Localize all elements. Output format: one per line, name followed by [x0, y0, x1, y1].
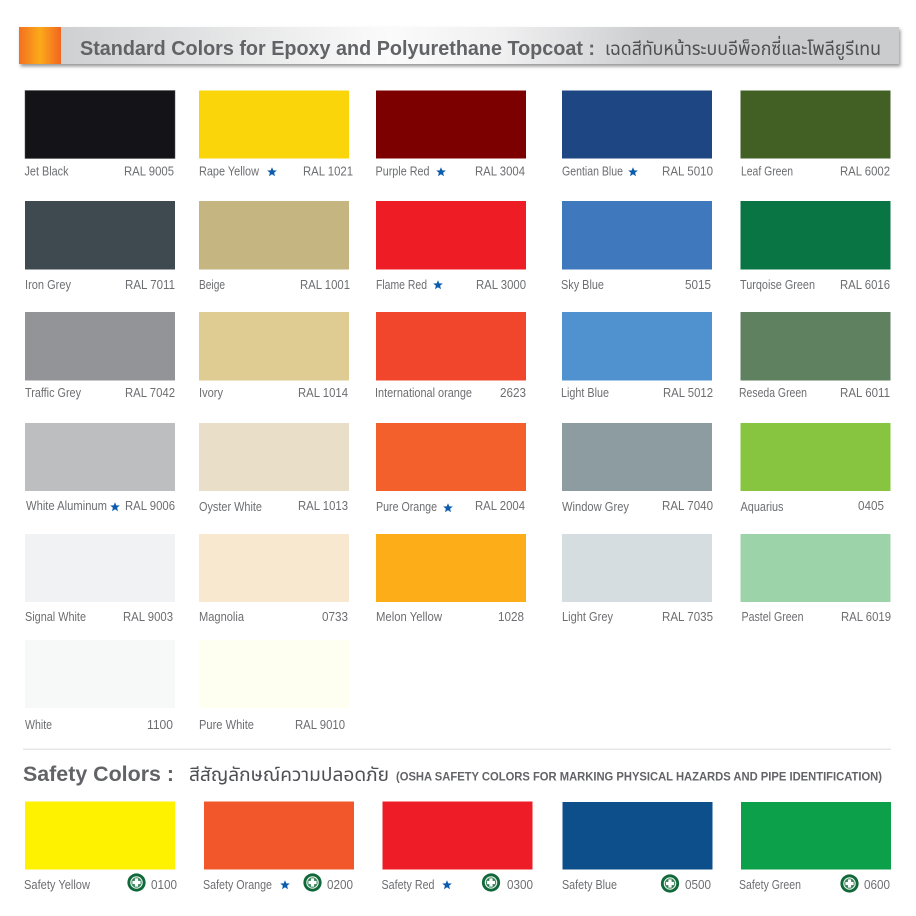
swatch: Sky Blue: [561, 201, 712, 292]
swatch: International orange: International orange: [375, 385, 472, 400]
swatch: Turqoise Green: Turqoise Green: [740, 277, 815, 292]
swatch: Turqoise Green: RAL 6016: [840, 277, 890, 292]
title: [80, 35, 881, 61]
panel: safety colors: [24, 802, 891, 893]
swatch: Light Grey: Light Grey: [562, 609, 613, 624]
swatch: Beige: Beige: [199, 277, 225, 292]
swatch: White Aluminum: RAL 9006: [125, 498, 175, 513]
swatch: International orange: 2623: [500, 385, 526, 400]
swatch: Pure White: [199, 640, 349, 732]
swatch: Light Grey: RAL 7035: [662, 609, 713, 624]
swatch: Pure Orange: RAL 2004: [475, 498, 525, 513]
swatch: Aquarius: Aquarius: [740, 499, 784, 514]
swatch: Jet Black: RAL 9005: [124, 164, 174, 178]
swatch: Safety Red: [382, 802, 533, 892]
swatch: Leaf Green: Leaf Green: [741, 164, 793, 178]
swatch: Beige: RAL 1001: [300, 277, 350, 292]
swatch: Rape Yellow: Rape Yellow: [199, 164, 260, 178]
swatch: Oyster White: RAL 1013: [298, 498, 348, 513]
swatch: Pure Orange: [376, 423, 526, 514]
swatch: Gentian Blue: [562, 90, 713, 178]
swatch: Sky Blue: 5015: [685, 277, 711, 292]
swatch: Jet Black: [24, 90, 175, 178]
title: เฉดสีทับหน้าระบบอีพ็อกซี่และโพลียูรีเทน: [605, 35, 881, 61]
swatch: Leaf Green: RAL 6002: [840, 164, 890, 178]
swatch: Rape Yellow: RAL 1021: [303, 164, 353, 178]
swatch: Aquarius: [740, 423, 890, 514]
swatch: Melon Yellow: [376, 534, 526, 624]
swatch: Purple Red: [376, 90, 526, 178]
swatch: Rape Yellow: [199, 90, 353, 178]
safety colors heading: สีสัญลักษณ์ความปลอดภัย: [189, 765, 389, 786]
swatch: Pastel Green: [740, 534, 891, 624]
swatch: Window Grey: [562, 423, 713, 514]
swatch: Leaf Green: [740, 90, 890, 178]
swatch: Iron Grey: Iron Grey: [25, 277, 71, 292]
swatch: Safety Blue: 0500: [685, 877, 711, 892]
swatch: Signal White: RAL 9003: [123, 609, 173, 624]
swatch: Safety Yellow: 0100: [151, 877, 177, 892]
swatch: Traffic Grey: [25, 312, 175, 400]
swatch: Reseda Green: RAL 6011: [840, 385, 890, 400]
swatch: Ivory: Ivory: [199, 385, 223, 400]
swatch: Signal White: [25, 534, 175, 624]
swatch: Sky Blue: Sky Blue: [561, 277, 604, 292]
swatch: Signal White: Signal White: [25, 609, 86, 624]
swatch: Window Grey: Window Grey: [562, 499, 629, 514]
safety colors heading: Safety Colors :: [23, 762, 174, 786]
orange gradient tab: [19, 27, 61, 64]
swatch: Safety Green: 0600: [864, 877, 890, 892]
swatch: White: White: [25, 717, 52, 732]
swatch: Ivory: RAL 1014: [298, 385, 348, 400]
swatch: Flame Red: [376, 201, 526, 292]
swatch: Jet Black: Jet Black: [24, 164, 69, 178]
swatch: Safety Green: [739, 802, 891, 893]
swatch: Ivory: [199, 312, 349, 400]
swatch: Turqoise Green: [740, 201, 890, 292]
swatch: Pastel Green: Pastel Green: [742, 609, 804, 624]
swatch: Safety Blue: [562, 802, 712, 893]
swatch: Purple Red: RAL 3004: [475, 164, 525, 178]
swatch: Pastel Green: RAL 6019: [841, 609, 891, 624]
swatch: Magnolia: Magnolia: [199, 609, 245, 624]
swatch: Safety Yellow: [24, 802, 177, 892]
swatch: Window Grey: RAL 7040: [662, 498, 713, 513]
swatch: Safety Orange: Safety Orange: [203, 877, 272, 892]
swatch: Magnolia: 0733: [322, 609, 348, 624]
swatch: White: 1100: [147, 717, 173, 732]
swatch: Light Blue: RAL 5012: [663, 385, 713, 400]
swatch: White: [25, 640, 175, 732]
swatch: Iron Grey: RAL 7011: [125, 277, 175, 292]
swatch: Safety Orange: [203, 802, 354, 892]
swatch: Magnolia: [199, 534, 349, 624]
swatch: Aquarius: 0405: [858, 498, 884, 513]
swatch: Pure Orange: Pure Orange: [376, 499, 437, 514]
swatch: Melon Yellow: Melon Yellow: [376, 609, 443, 624]
swatch: Safety Blue: Safety Blue: [562, 877, 617, 892]
swatch: Reseda Green: Reseda Green: [739, 385, 807, 400]
swatch: Reseda Green: [739, 312, 890, 400]
swatch: Iron Grey: [25, 201, 175, 292]
swatch: White Aluminum: White Aluminum: [26, 498, 107, 513]
swatch: White Aluminum: [25, 423, 175, 513]
swatch: Safety Yellow: Safety Yellow: [24, 877, 91, 892]
swatch: Melon Yellow: 1028: [498, 609, 524, 624]
swatch: Pure White: Pure White: [199, 717, 254, 732]
swatch: Light Blue: [561, 312, 713, 400]
swatch: Traffic Grey: Traffic Grey: [25, 385, 81, 400]
panel: standard colors grid: [24, 90, 891, 732]
title: Standard Colors for Epoxy and Polyurethane Topcoat :: [80, 38, 595, 60]
header banner: [19, 27, 899, 64]
swatch: Purple Red: Purple Red: [376, 164, 430, 178]
swatch: Safety Green: Safety Green: [739, 877, 801, 892]
swatch: Traffic Grey: RAL 7042: [125, 385, 175, 400]
safety colors heading: [23, 762, 882, 786]
swatch: Safety Red: Safety Red: [382, 877, 434, 892]
swatch: Gentian Blue: RAL 5010: [662, 164, 713, 178]
swatch: Light Blue: Light Blue: [561, 385, 609, 400]
swatch: Beige: [199, 201, 350, 292]
swatch: Safety Red: 0300: [507, 877, 533, 892]
swatch: Oyster White: [199, 423, 349, 514]
swatch: International orange: [375, 312, 526, 400]
swatch: Safety Orange: 0200: [327, 877, 353, 892]
safety colors heading: (OSHA SAFETY COLORS FOR MARKING PHYSICAL HAZARDS AND PIPE IDENTIFICATION): [396, 772, 882, 784]
swatch: Oyster White: Oyster White: [199, 499, 262, 514]
swatch: Light Grey: [562, 534, 713, 624]
swatch: Gentian Blue: Gentian Blue: [562, 164, 623, 178]
swatch: Flame Red: RAL 3000: [476, 277, 526, 292]
swatch: Flame Red: Flame Red: [376, 277, 427, 292]
swatch: Pure White: RAL 9010: [295, 717, 345, 732]
